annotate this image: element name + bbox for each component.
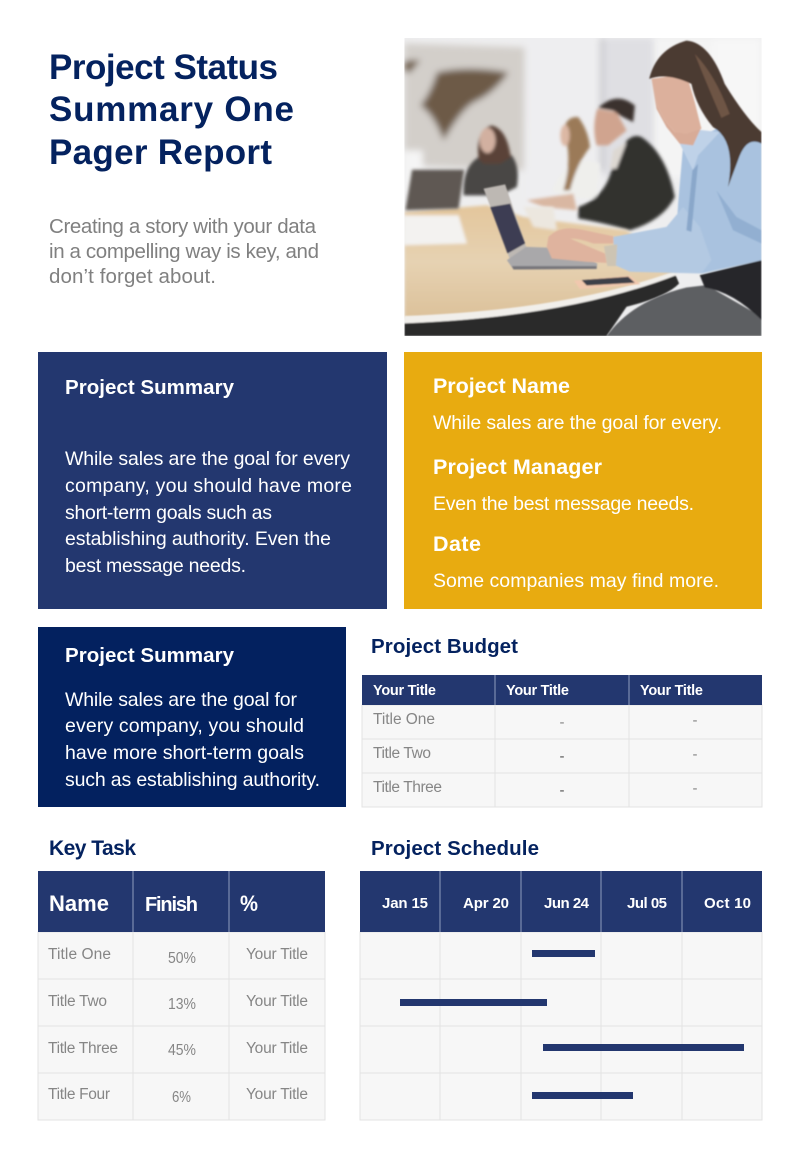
project manager: Project Manager	[433, 455, 603, 479]
key task percentages	[168, 950, 196, 1106]
key task titles: Your Title	[246, 1086, 308, 1103]
key task titles	[246, 946, 308, 1103]
back laptop	[405, 170, 464, 210]
budget header row: Your Title	[506, 683, 569, 699]
phone	[574, 276, 641, 289]
project manager: Even the best message needs.	[433, 493, 694, 515]
schedule date headers: Oct 10	[704, 895, 751, 912]
budget values: -	[692, 712, 698, 729]
panel heading: Project Summary	[65, 644, 235, 667]
intro text: in a compelling way is key, and	[49, 240, 319, 263]
schedule date headers: Jul 05	[627, 895, 667, 912]
key task percentages: 6%	[172, 1089, 191, 1106]
heading: project schedule: Project Schedule	[371, 837, 539, 860]
panel body text: every company, you should	[65, 715, 304, 737]
panel: project summary (blue)	[38, 352, 387, 609]
project name	[433, 374, 722, 434]
key task header row: Finish	[145, 894, 198, 916]
budget header row: Your Title	[373, 683, 436, 699]
title	[49, 48, 294, 172]
table: project budget	[362, 675, 762, 807]
budget values: -	[560, 748, 564, 765]
budget values: -	[692, 780, 698, 797]
title: Pager Report	[49, 133, 272, 172]
title: Summary One	[49, 90, 294, 129]
budget header row	[373, 683, 703, 699]
schedule bars	[400, 950, 744, 1099]
panel body text: While sales are the goal for	[65, 689, 298, 711]
table top	[404, 205, 676, 318]
heading: key task: Key Task	[49, 837, 136, 860]
panel: project details (yellow)	[404, 352, 762, 609]
budget values: -	[560, 782, 564, 799]
key task header row	[49, 891, 258, 916]
schedule date headers: Jun 24	[544, 895, 590, 912]
panel body text: company, you should have more	[65, 475, 352, 497]
budget row labels: Title Three	[373, 779, 442, 796]
chart: project schedule gantt	[360, 871, 762, 1120]
schedule date headers	[382, 895, 751, 912]
woman	[547, 41, 762, 336]
date: Some companies may find more.	[433, 570, 719, 592]
key task names: Title One	[48, 946, 111, 963]
budget values	[560, 712, 698, 799]
key task titles: Your Title	[246, 1040, 308, 1057]
background people	[463, 99, 675, 230]
panel body text: best message needs.	[65, 555, 246, 577]
project manager	[433, 455, 694, 515]
budget values: -	[692, 746, 698, 763]
intro text: Creating a story with your data	[49, 215, 317, 238]
key task percentages: 50%	[168, 950, 196, 967]
key task names	[48, 946, 118, 1103]
panel body text	[65, 689, 320, 791]
intro text: don’t forget about.	[49, 265, 216, 288]
panel body text: have more short-term goals	[65, 742, 304, 764]
budget row labels: Title Two	[373, 745, 431, 762]
panel body text: While sales are the goal for every	[65, 448, 350, 470]
date: Date	[433, 532, 481, 556]
panel heading: Project Summary	[65, 376, 235, 399]
heading: project budget: Project Budget	[371, 635, 518, 658]
panel body text	[65, 448, 352, 577]
key task titles: Your Title	[246, 993, 308, 1010]
key task names: Title Three	[48, 1040, 118, 1057]
key task names: Title Two	[48, 993, 107, 1010]
panel body text: such as establishing authority.	[65, 769, 320, 791]
key task titles: Your Title	[246, 946, 308, 963]
budget header row: Your Title	[640, 683, 703, 699]
project name: While sales are the goal for every.	[433, 412, 722, 434]
panel body text: short-term goals such as	[65, 502, 272, 524]
main laptop	[484, 184, 597, 269]
key task percentages: 13%	[168, 996, 196, 1013]
key task header row: %	[240, 891, 258, 916]
key task percentages: 45%	[168, 1042, 196, 1059]
schedule date headers: Jan 15	[382, 895, 428, 912]
project name: Project Name	[433, 374, 570, 398]
budget row labels	[373, 711, 442, 796]
intro text	[49, 215, 319, 288]
schedule date headers: Apr 20	[463, 895, 509, 912]
table: key task	[38, 871, 325, 1120]
photo: team meeting at a table	[404, 38, 762, 336]
panel: project summary (dark navy)	[38, 627, 346, 807]
key task header row: Name	[49, 891, 109, 916]
title: Project Status	[49, 48, 278, 87]
date	[433, 532, 719, 592]
budget row labels: Title One	[373, 711, 435, 728]
panel body text: establishing authority. Even the	[65, 528, 331, 550]
budget values: -	[560, 714, 564, 731]
key task names: Title Four	[48, 1086, 110, 1103]
